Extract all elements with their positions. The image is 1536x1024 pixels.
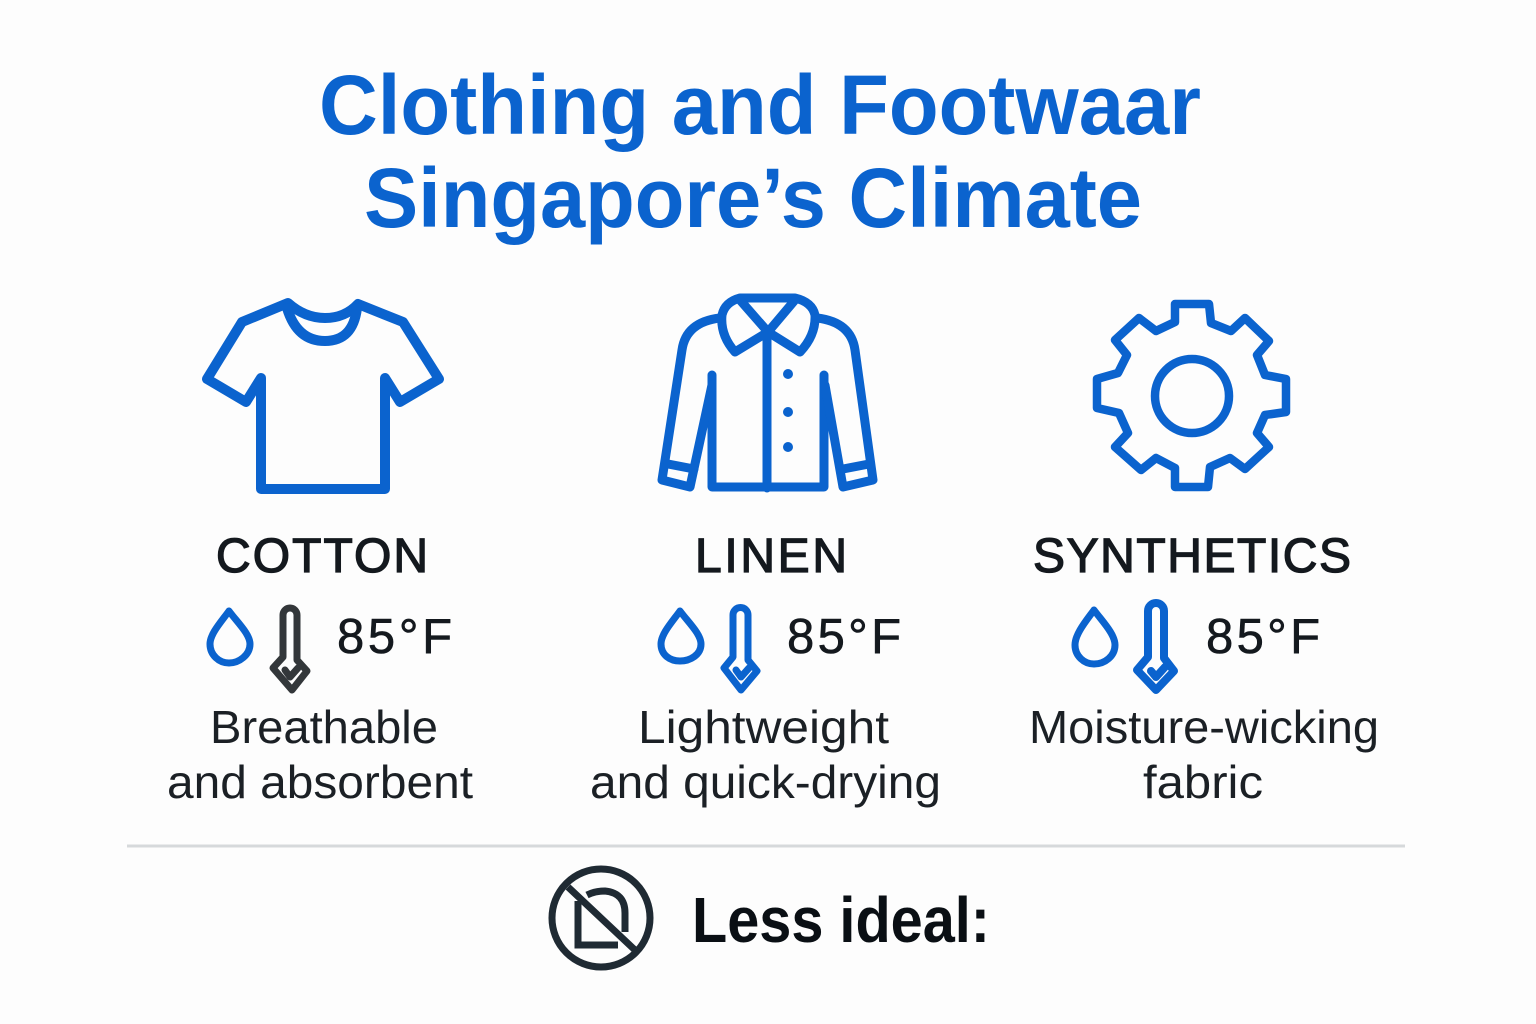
- description: and absorbent: [167, 756, 473, 808]
- icon: thermometer: [1137, 603, 1174, 690]
- title: Clothing and Footwaar: [319, 58, 1201, 152]
- panel: linen: [590, 298, 941, 808]
- icon: shirt buttons: [783, 369, 793, 452]
- icon: t-shirt: [207, 303, 439, 489]
- title: [319, 58, 1201, 245]
- description: [590, 701, 941, 808]
- panel: synthetics: [1029, 304, 1379, 808]
- heading: linen: LINEN: [695, 530, 847, 583]
- icon: shirt: [662, 298, 873, 488]
- description: Lightweight: [638, 701, 889, 753]
- icon: prohibited footwear: [552, 869, 650, 967]
- temperature: 85°F: [337, 610, 452, 664]
- icon: water drop: [661, 611, 701, 661]
- description: Breathable: [210, 701, 438, 753]
- temperature: 85°F: [787, 610, 901, 664]
- description: Moisture-wicking: [1029, 701, 1379, 753]
- description: [1029, 701, 1379, 808]
- icon: thermometer: [724, 608, 757, 690]
- description: and quick-drying: [590, 756, 941, 808]
- heading: cotton: COTTON: [216, 530, 428, 583]
- icon: thermometer: [273, 608, 307, 690]
- description: [167, 701, 473, 808]
- description: fabric: [1143, 756, 1263, 808]
- title: Singapore’s Climate: [364, 151, 1142, 245]
- panel: cotton: [167, 303, 473, 808]
- temperature: 85°F: [1206, 610, 1320, 664]
- icon: gear: [1097, 304, 1286, 487]
- heading: synthetics: SYNTHETICS: [1033, 530, 1351, 583]
- icon: water drop: [210, 611, 250, 663]
- label: less ideal: Less ideal:: [692, 884, 990, 956]
- icon: water drop: [1075, 610, 1115, 664]
- section: less ideal: [552, 869, 990, 967]
